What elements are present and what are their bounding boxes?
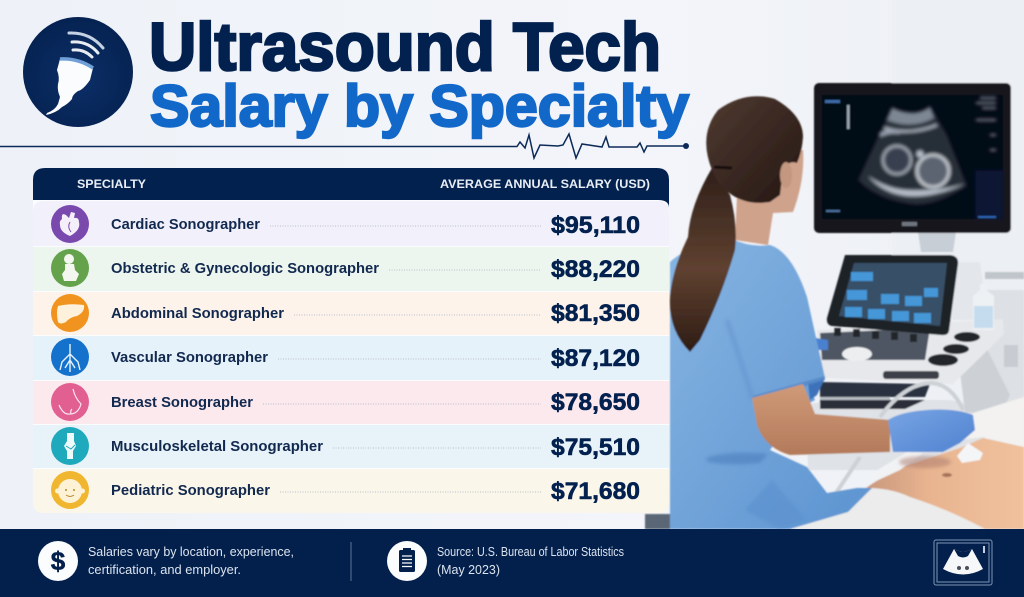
table header: SPECIALTY (77, 177, 146, 191)
row: vascular: $87,120 (551, 345, 640, 372)
icon: heart (51, 205, 89, 243)
icon: liver (51, 294, 89, 332)
footer note: salaries: Salaries vary by location, experience, (88, 545, 294, 559)
divider end dot (683, 143, 689, 149)
table body (33, 190, 669, 513)
row: pediatric: $71,680 (551, 478, 640, 505)
icon: baby face (51, 471, 89, 509)
row: abdominal (33, 292, 669, 335)
row: musculoskeletal (33, 425, 669, 468)
title: Salary by Specialty (150, 73, 689, 138)
icon: ultrasound monitor badge (934, 540, 992, 585)
row: obstetric and gynecologic: $88,220 (551, 256, 640, 283)
footer note: salaries: certification, and employer. (88, 563, 241, 577)
icon: breast outline (51, 383, 89, 421)
row: pediatric (33, 469, 669, 513)
touch screen (827, 255, 958, 335)
gel bottle (973, 284, 994, 330)
footer note: source: Source: U.S. Bureau of Labor Statistics (437, 545, 624, 559)
row: abdominal: Abdominal Sonographer (111, 305, 284, 322)
stool (645, 514, 675, 529)
icon: dollar sign: $ (51, 546, 66, 576)
row: breast (33, 381, 669, 424)
patient sheet and abdomen (783, 397, 1024, 529)
row: cardiac: Cardiac Sonographer (111, 216, 260, 233)
row: musculoskeletal: $75,510 (551, 434, 640, 461)
row: breast: Breast Sonographer (111, 394, 253, 411)
row: musculoskeletal: Musculoskeletal Sonographer (111, 438, 323, 455)
table header (33, 168, 669, 208)
sonographer forearm (752, 384, 890, 455)
sonographer hair (670, 96, 803, 352)
footer band (0, 529, 1024, 597)
row: vascular (33, 336, 669, 380)
title (149, 9, 689, 138)
sonographer neck and face (735, 150, 803, 245)
row: cardiac: $95,110 (551, 212, 640, 239)
icon: dollar sign (38, 541, 78, 581)
icon: pregnant figure (51, 249, 89, 287)
title: Ultrasound Tech (149, 9, 661, 85)
footer note: source: (May 2023) (437, 563, 500, 577)
gloved hand (888, 410, 975, 452)
probe cable (830, 383, 963, 502)
row: obstetric and gynecologic: Obstetric & Gynecologic Sonographer (111, 260, 379, 277)
row: obstetric and gynecologic (33, 247, 669, 291)
row: vascular: Vascular Sonographer (111, 349, 268, 366)
logo: ultrasound probe badge (23, 17, 133, 127)
footer note: source (437, 545, 624, 577)
salary table (33, 168, 669, 513)
table header: AVERAGE ANNUAL SALARY (USD) (440, 177, 650, 191)
icon: knee joint (51, 427, 89, 465)
row: abdominal: $81,350 (551, 300, 640, 327)
ultrasound monitor (814, 83, 1011, 252)
row: cardiac (33, 201, 669, 246)
row: pediatric: Pediatric Sonographer (111, 482, 270, 499)
machine console (806, 262, 1024, 470)
icon: clipboard (387, 541, 427, 581)
icon: blood vessels (51, 338, 89, 376)
row: breast: $78,650 (551, 389, 640, 416)
sonographer scrubs (670, 238, 872, 529)
heartbeat divider line (0, 134, 687, 158)
ultrasound probe (957, 443, 983, 463)
footer note: salaries (88, 545, 294, 577)
photo: sonographer scanning a patient (645, 0, 1024, 529)
